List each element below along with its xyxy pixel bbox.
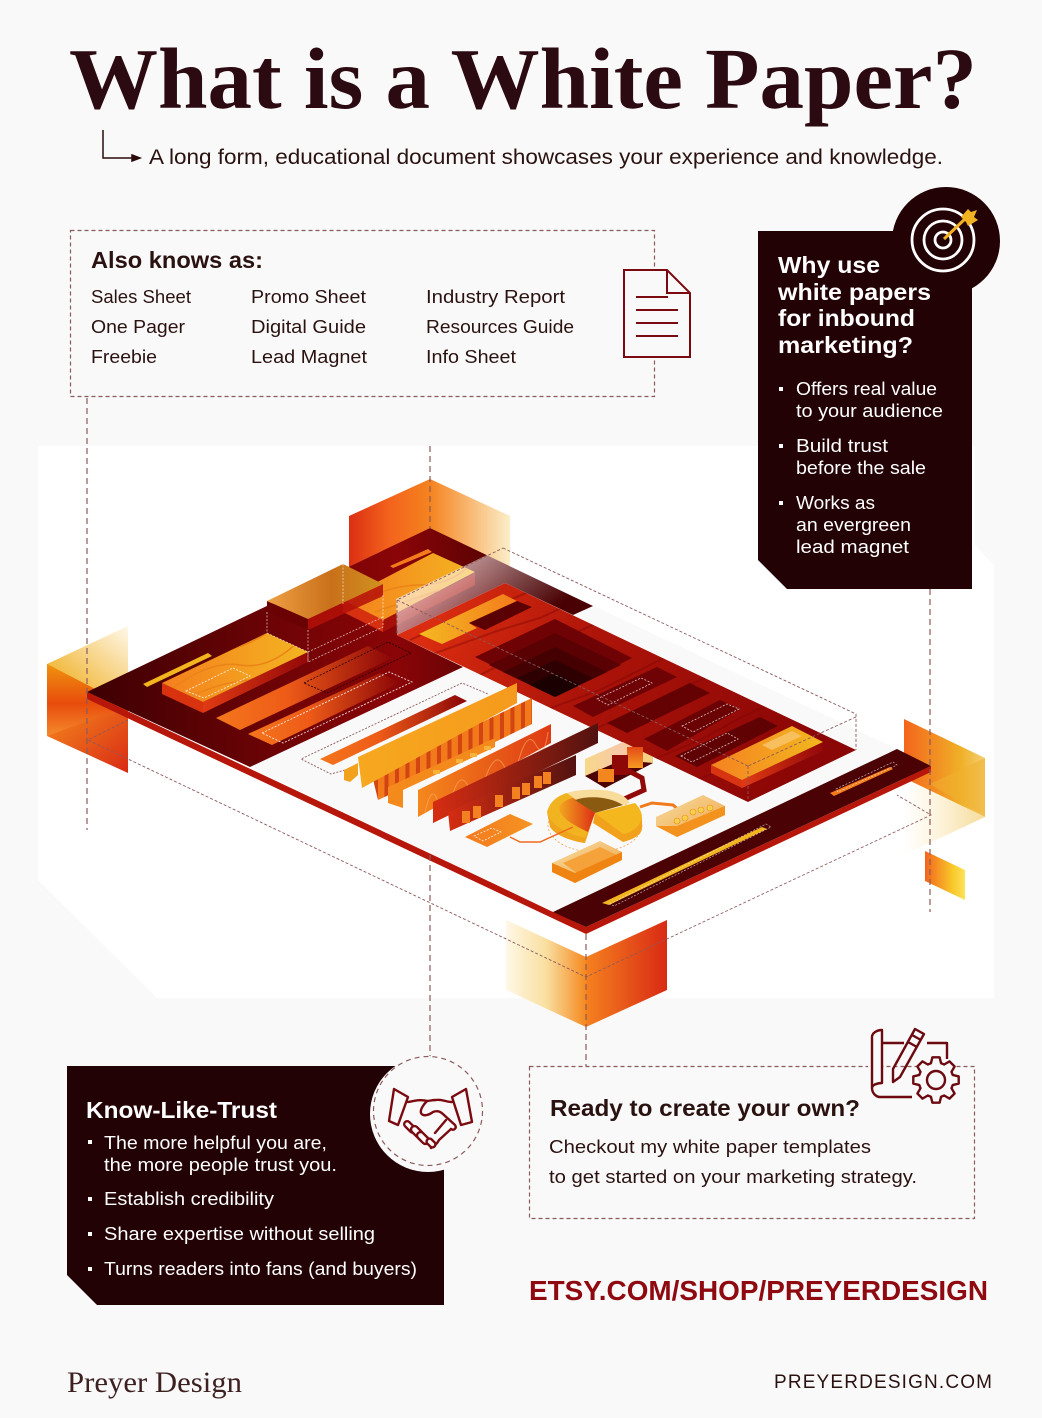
chart: glass tray <box>552 841 622 883</box>
bullet list: reasons: lead magnet <box>796 536 909 557</box>
bullet list: trust: the more people trust you. <box>104 1154 337 1175</box>
bullet list: reasons <box>779 378 943 557</box>
chart: dark band <box>433 723 598 823</box>
body text: to get started on your marketing strategy. <box>549 1166 917 1187</box>
cube: top <box>349 479 510 567</box>
yellow footer bar <box>602 827 767 905</box>
connector: bars to pie <box>622 770 644 800</box>
large dashed wireframe <box>88 548 931 977</box>
list of alternate names: Info Sheet <box>426 346 516 367</box>
panel: know-like-trust <box>67 1056 486 1305</box>
arrow: subtitle pointer <box>103 130 140 161</box>
list of alternate names: Promo Sheet <box>251 286 366 307</box>
title: What is a White Paper? <box>69 30 977 127</box>
paper sheet <box>250 605 897 912</box>
heading: ready: Ready to create your own? <box>550 1095 860 1121</box>
left wood block <box>160 630 310 713</box>
bullet list: trust: Establish credibility <box>104 1188 275 1209</box>
body text <box>549 1136 917 1187</box>
cube: left <box>47 626 128 773</box>
heading: why use: marketing? <box>778 332 913 358</box>
bullet list: reasons: Works as <box>796 492 875 513</box>
dark bottom strip <box>553 749 931 927</box>
cube: bottom <box>506 920 667 1027</box>
chart: pie <box>547 790 642 852</box>
list of alternate names: Sales Sheet <box>91 286 191 307</box>
bullet list: reasons: before the sale <box>796 457 926 478</box>
heading: know-like-trust: Know-Like-Trust <box>86 1097 277 1123</box>
small orange stripe <box>390 549 432 568</box>
heading: why use: white papers <box>777 279 931 305</box>
list of alternate names: Lead Magnet <box>251 346 367 367</box>
chart: wave ribbon <box>418 724 551 817</box>
chart: candlestick ribbon <box>448 755 576 831</box>
dashed footer outlines <box>610 762 897 906</box>
isometric illustration: white paper <box>47 479 985 1027</box>
icon: handshake <box>389 1089 472 1149</box>
upper wood block <box>343 553 475 632</box>
chart: plate with bumps <box>388 738 495 808</box>
stepped well <box>475 619 632 697</box>
panel: ready to create <box>530 1029 974 1218</box>
panel: dark left cover <box>87 528 593 767</box>
vertical dashed connectors <box>87 398 930 1066</box>
chart: comb bars back <box>372 698 532 800</box>
subtitle: A long form, educational document showcases your experience and knowledge. <box>149 146 943 169</box>
cube: right <box>904 719 985 855</box>
yellow 3D box <box>711 726 823 788</box>
dark label <box>469 601 532 630</box>
cube: small right <box>925 851 965 900</box>
bullet list: reasons: Offers real value <box>796 378 937 399</box>
heading: why use <box>777 252 931 358</box>
bullet list: trust: The more helpful you are, <box>104 1132 327 1153</box>
list of alternate names: Industry Report <box>426 286 565 307</box>
bullet list: reasons: an evergreen <box>796 514 911 535</box>
translucent floating box <box>267 564 383 662</box>
chart: comb bars front <box>344 683 517 788</box>
icon: blueprint, pencil and gear <box>868 1029 959 1103</box>
icon: target with arrow <box>912 209 978 271</box>
connector: pie to tile <box>640 803 682 813</box>
wood grain <box>410 592 813 780</box>
icon: document <box>624 270 690 357</box>
list of alternate names: Digital Guide <box>251 316 366 337</box>
panel: why use white papers <box>758 187 1000 589</box>
bullet list: trust: Share expertise without selling <box>104 1223 375 1244</box>
panel: red wood top <box>397 583 856 802</box>
yellow heading bar <box>419 594 517 644</box>
heading: why use: for inbound <box>778 305 915 331</box>
dark content blocks <box>573 667 778 767</box>
bullet list: reasons: Build trust <box>796 435 888 456</box>
chart: flow tile <box>465 814 573 847</box>
white fade overlay <box>396 555 593 635</box>
yellow stripe <box>143 653 212 687</box>
bullet list: trust: Turns readers into fans (and buyers) <box>104 1258 417 1279</box>
dashed white placeholders <box>597 678 739 762</box>
badge: handshake <box>370 1056 486 1172</box>
call to action link: ETSY.COM/SHOP/PREYERDESIGN <box>529 1275 988 1306</box>
list of alternate names: One Pager <box>91 316 185 337</box>
heading: also knows as: Also knows as: <box>91 247 263 273</box>
chart: header bar with dashed frame <box>301 683 488 774</box>
orange bar 2 <box>248 673 400 745</box>
footer website: PREYERDESIGN.COM <box>774 1372 992 1393</box>
orange bar 1 <box>216 646 393 730</box>
panel: also known as <box>70 230 690 396</box>
heading: why use: Why use <box>778 252 880 278</box>
board edge <box>87 692 931 934</box>
footer brand: Preyer Design <box>67 1366 242 1399</box>
chart: stacked bars block <box>585 742 653 788</box>
list of alternate names: Freebie <box>91 346 157 367</box>
dashed bar outlines <box>262 642 412 743</box>
white backdrop panel <box>38 446 994 998</box>
chart: glass tile with dots <box>656 795 725 837</box>
list of alternate names: Resources Guide <box>426 316 574 337</box>
bullet list: reasons: to your audience <box>796 400 943 421</box>
list of alternate names <box>91 286 574 367</box>
body text: Checkout my white paper templates <box>549 1136 871 1157</box>
orange footer bar <box>830 767 893 796</box>
bullet list: trust <box>88 1132 417 1279</box>
